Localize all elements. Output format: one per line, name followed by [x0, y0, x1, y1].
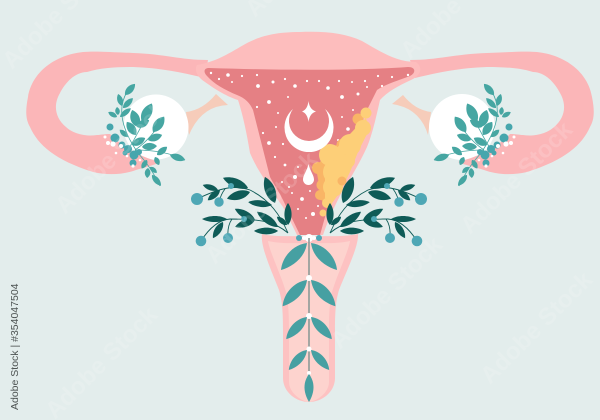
watermarks: Adobe Stock [325, 231, 448, 354]
neck beads [296, 234, 322, 242]
left ovary [124, 94, 188, 160]
uterine cavity [205, 67, 414, 235]
vagina outer [262, 234, 358, 402]
yellow endometriosis growth [312, 108, 372, 216]
crescent moon [284, 109, 333, 152]
right ligament [392, 95, 431, 135]
stock id label: Adobe Stock | #354047504 [9, 283, 21, 410]
right ovary sprig [433, 82, 516, 188]
left ligament [186, 94, 228, 135]
right fallopian tube [410, 52, 594, 174]
central leaf stem [306, 238, 312, 376]
vagina inner [268, 241, 350, 402]
central leaves [281, 243, 337, 402]
left fallopian tube [26, 52, 208, 174]
left ovary sprig [104, 82, 186, 188]
watermarks: Adobe Stock [200, 146, 323, 269]
left berry branches [191, 174, 292, 246]
right berry branches [326, 174, 427, 246]
star speckles [210, 72, 409, 219]
right ovary [429, 94, 495, 160]
watermarks: Adobe Stock [455, 116, 578, 239]
watermarks: Adobe Stock [475, 266, 598, 389]
uterus body [196, 32, 420, 235]
four-point star [302, 101, 316, 122]
watermarks: Adobe Stock [50, 96, 173, 219]
drop [303, 164, 314, 185]
